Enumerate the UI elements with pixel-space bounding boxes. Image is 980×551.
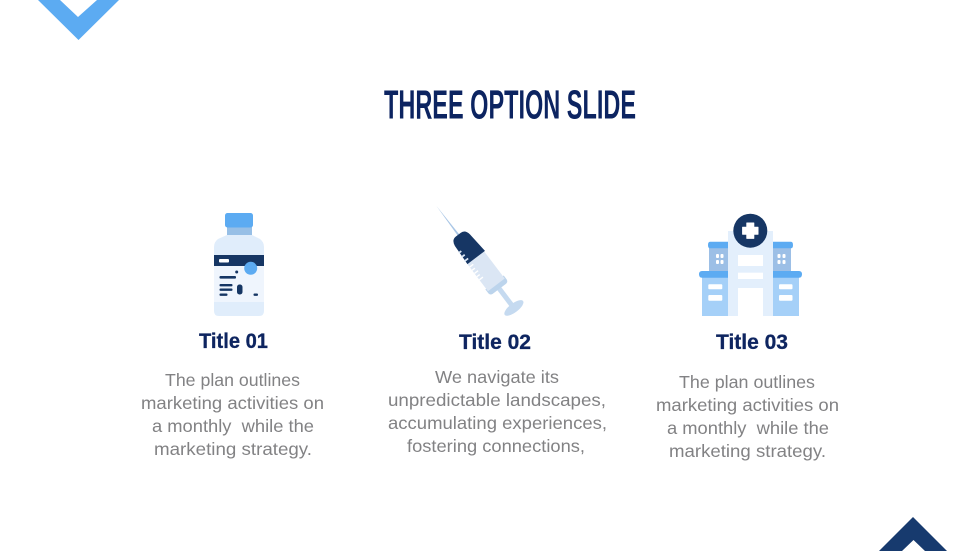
heading: Title 02: Title 02 [459, 330, 531, 354]
panel: option 1 [141, 213, 324, 459]
decorative chevron: top left [38, 0, 119, 40]
heading: Title 01: Title 01 [199, 329, 268, 353]
heading: Title 03: Title 03 [716, 330, 788, 354]
text block: option 3 description: marketing strategy. [669, 441, 826, 461]
text block: option 1 description: a monthly while the [152, 416, 314, 436]
text block: option 2 description [388, 367, 607, 456]
text block: option 3 description [656, 372, 839, 461]
text block: option 1 description: marketing strategy. [154, 439, 312, 459]
text block: option 2 description: accumulating experiences, [388, 413, 607, 433]
icon: medicine bottle [214, 213, 264, 316]
decorative chevron: bottom right [879, 517, 947, 551]
text block: option 3 description: marketing activities on [656, 395, 839, 415]
panel: option 2 [388, 199, 607, 456]
text block: option 2 description: We navigate its [435, 367, 559, 387]
text block: option 1 description: The plan outlines [165, 370, 300, 390]
text block: option 1 description: marketing activities on [141, 393, 324, 413]
text block: option 3 description: The plan outlines [679, 372, 815, 392]
panel: option 3 [656, 214, 839, 461]
text block: option 3 description: a monthly while the [667, 418, 829, 438]
icon: syringe [427, 199, 526, 318]
text block: option 2 description: unpredictable landscapes, [388, 390, 606, 410]
text block: option 1 description [141, 370, 324, 459]
icon: hospital [699, 214, 802, 316]
text block: option 2 description: fostering connections, [407, 436, 585, 456]
title: THREE OPTION SLIDE [384, 82, 636, 128]
